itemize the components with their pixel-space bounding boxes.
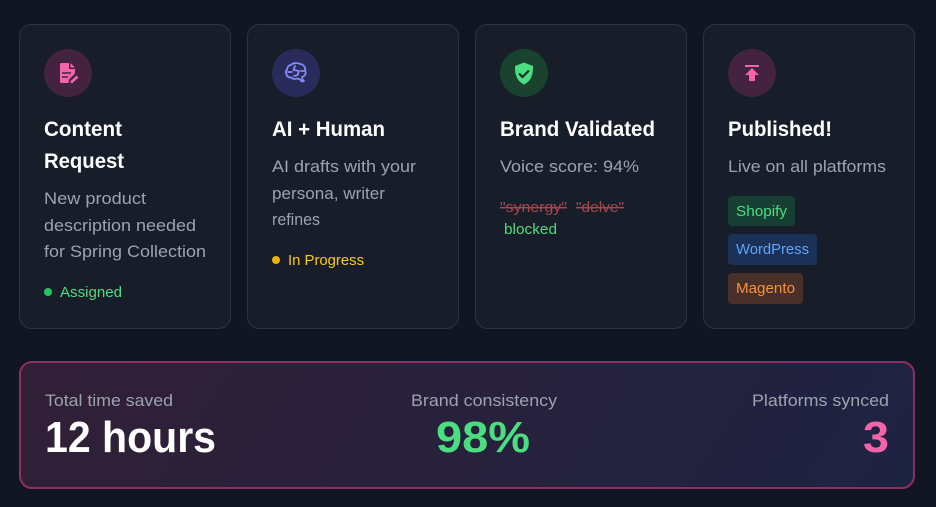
heading: Published! xyxy=(728,118,832,141)
stat: total time saved: Total time saved xyxy=(45,391,173,410)
blocked words: "synergy" xyxy=(500,199,567,216)
tag: wordpress xyxy=(728,234,817,265)
description: Live on all platforms xyxy=(728,157,886,176)
panel: AI + human xyxy=(248,24,458,328)
description xyxy=(44,189,206,261)
tag: magento: Magento xyxy=(736,280,795,297)
blocked words: blocked xyxy=(504,221,557,238)
status: assigned: Assigned xyxy=(60,284,122,301)
tag: shopify xyxy=(728,196,795,226)
stat: total time saved: 12 hours xyxy=(45,413,216,462)
description: New product xyxy=(44,189,146,208)
blocked words xyxy=(500,199,624,238)
icon: shield check xyxy=(500,49,548,97)
icon: brain xyxy=(272,49,320,97)
stat: total time saved xyxy=(45,391,216,462)
description: persona, writer xyxy=(272,184,385,203)
stat: platforms synced xyxy=(752,391,889,462)
heading: Request xyxy=(44,150,124,173)
heading: AI + Human xyxy=(272,118,385,141)
description: description needed xyxy=(44,216,196,235)
heading: Brand Validated xyxy=(500,118,655,141)
stat: brand consistency: Brand consistency xyxy=(411,391,558,410)
panel: content request xyxy=(20,24,230,328)
tag: wordpress: WordPress xyxy=(736,241,809,258)
stat: platforms synced: 3 xyxy=(863,413,889,462)
icon: publish arrow xyxy=(728,49,776,97)
panel: brand validated xyxy=(476,24,686,328)
tag: magento xyxy=(728,273,803,304)
description: Voice score: 94% xyxy=(500,157,639,176)
icon: document with pencil xyxy=(44,49,92,97)
heading: Content xyxy=(44,118,122,141)
panel: published xyxy=(704,24,914,328)
description: refines xyxy=(272,210,320,229)
description xyxy=(272,157,416,229)
status: in progress: In Progress xyxy=(288,252,364,269)
tag: shopify: Shopify xyxy=(736,203,787,220)
description: AI drafts with your xyxy=(272,157,416,176)
stat: brand consistency: 98% xyxy=(436,413,530,462)
description: for Spring Collection xyxy=(44,242,206,261)
panel: summary stats xyxy=(20,362,914,488)
stat: platforms synced: Platforms synced xyxy=(752,391,889,410)
stat: brand consistency xyxy=(411,391,558,462)
blocked words: "delve" xyxy=(576,199,624,216)
heading xyxy=(44,118,124,173)
